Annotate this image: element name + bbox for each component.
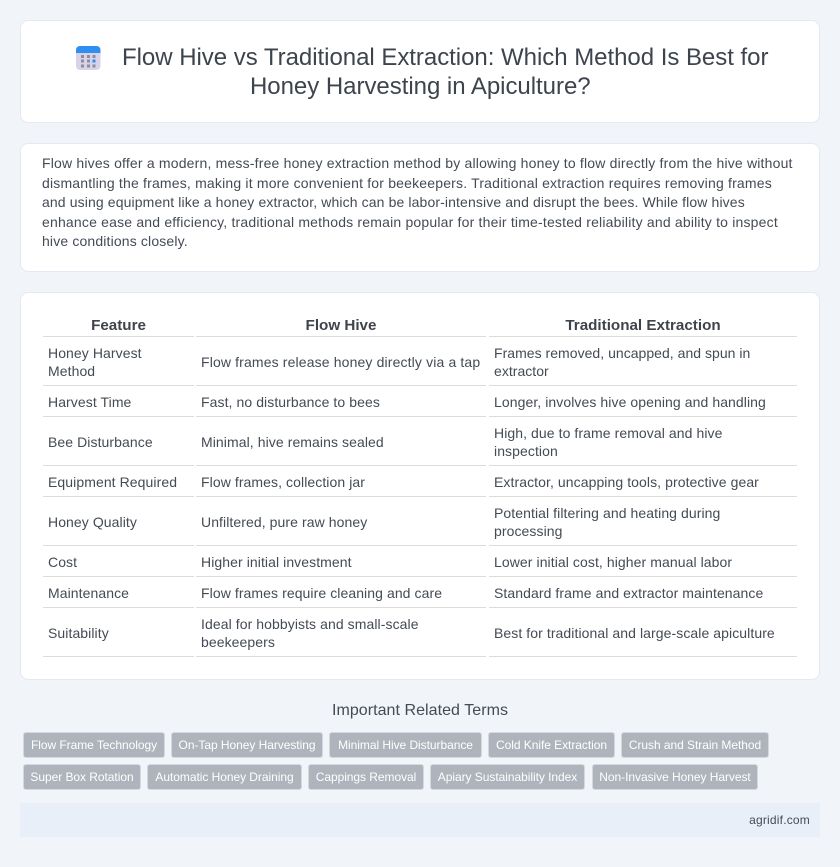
comparison table: Ideal for hobbyists and small-scale [201, 616, 419, 632]
table header: feature: Feature [91, 317, 146, 334]
related term tags: Apiary Sustainability Index [438, 770, 577, 784]
title: Flow Hive vs Traditional Extraction: Which Method Is Best for [122, 44, 768, 71]
related term tags: Super Box Rotation [30, 770, 134, 784]
comparison table: Higher initial investment [201, 554, 352, 570]
related term tags: Flow Frame Technology [31, 738, 157, 752]
related term tags [23, 732, 769, 790]
table header: flow hive [196, 317, 486, 337]
related term tags: Minimal Hive Disturbance [338, 738, 473, 752]
intro text: hive conditions closely. [42, 233, 188, 249]
comparison table panel [20, 292, 820, 680]
intro text: and using equipment like a honey extractor, which can be labor-intensive and disrupt the bees. While flow hives [42, 194, 745, 210]
table header: traditional: Traditional Extraction [565, 317, 721, 334]
footer bar [20, 803, 820, 837]
footer source: agridif.com [749, 813, 810, 827]
intro text: Flow hives offer a modern, mess-free honey extraction method by allowing honey to flow directly from the hive without [42, 155, 793, 171]
comparison table: Maintenance [48, 585, 129, 601]
comparison table: Flow frames require cleaning and care [201, 585, 442, 601]
comparison table: Potential filtering and heating during [494, 505, 720, 521]
comparison table: Frames removed, uncapped, and spun in [494, 345, 750, 361]
comparison table: Best for traditional and large-scale apiculture [494, 625, 775, 641]
comparison table: Standard frame and extractor maintenance [494, 585, 763, 601]
icon: calendar [76, 46, 100, 70]
title: Honey Harvesting in Apiculture? [250, 73, 591, 100]
table header: feature [43, 317, 194, 337]
comparison table: Fast, no disturbance to bees [201, 394, 380, 410]
comparison table: Longer, involves hive opening and handling [494, 394, 766, 410]
comparison table: Lower initial cost, higher manual labor [494, 554, 732, 570]
comparison table: Extractor, uncapping tools, protective gear [494, 474, 759, 490]
comparison table: Honey Harvest [48, 345, 142, 361]
related term tags: Cappings Removal [316, 770, 416, 784]
comparison table: Suitability [48, 625, 109, 641]
comparison table: Harvest Time [48, 394, 131, 410]
table header: flow hive: Flow Hive [306, 317, 376, 334]
related term tags: On-Tap Honey Harvesting [179, 738, 315, 752]
comparison table: Bee Disturbance [48, 434, 153, 450]
table header: traditional [489, 317, 797, 337]
comparison table: Flow frames release honey directly via a tap [201, 354, 480, 370]
header card [20, 20, 820, 123]
comparison table: inspection [494, 443, 558, 459]
comparison table: processing [494, 523, 563, 539]
comparison table [43, 317, 797, 657]
related term tags: Cold Knife Extraction [496, 738, 607, 752]
comparison table: Honey Quality [48, 514, 137, 530]
intro text [42, 155, 793, 249]
comparison table: Minimal, hive remains sealed [201, 434, 384, 450]
intro text: enhance ease and efficiency, traditional methods remain popular for their time-tested reliability and ability to inspect [42, 214, 778, 230]
comparison table: Unfiltered, pure raw honey [201, 514, 367, 530]
comparison table: beekeepers [201, 634, 275, 650]
intro text: dismantling the frames, making it more convenient for beekeepers. Traditional extraction requires removing frames [42, 175, 772, 191]
related terms heading: Important Related Terms [332, 702, 508, 719]
related term tags: Crush and Strain Method [629, 738, 761, 752]
comparison table: extractor [494, 363, 549, 379]
comparison table: Flow frames, collection jar [201, 474, 365, 490]
comparison table: Cost [48, 554, 77, 570]
comparison table: Equipment Required [48, 474, 177, 490]
related term tags: Automatic Honey Draining [155, 770, 294, 784]
title [122, 44, 768, 100]
intro panel [20, 143, 820, 272]
comparison table: Method [48, 363, 95, 379]
related term tags: Non-Invasive Honey Harvest [599, 770, 751, 784]
comparison table: High, due to frame removal and hive [494, 425, 722, 441]
